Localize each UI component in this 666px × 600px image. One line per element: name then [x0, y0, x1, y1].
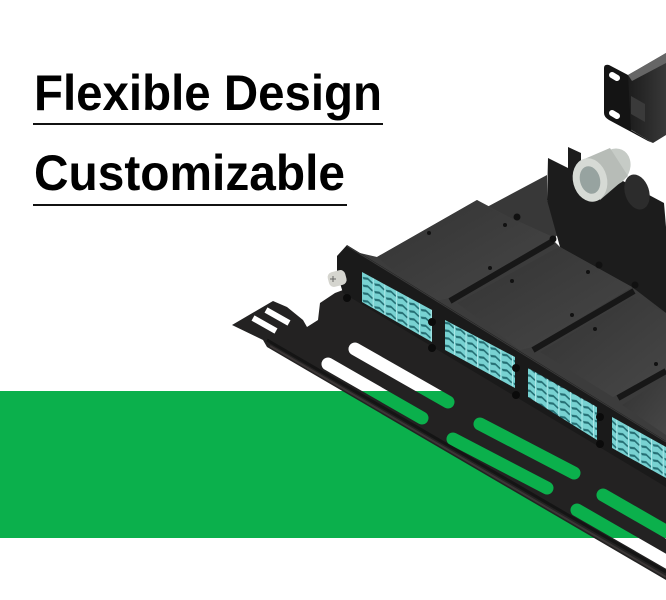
module cover 4: [622, 377, 666, 435]
module cover gaps: [450, 241, 666, 398]
tray floor: [487, 175, 560, 240]
module cover 2: [457, 247, 632, 350]
cover screws: [427, 214, 658, 366]
flange holes: [612, 75, 617, 116]
rear wall: [547, 147, 666, 320]
thumb screw: [326, 269, 348, 288]
box flange: [604, 65, 653, 143]
box switch: [631, 96, 645, 122]
cable gland: [568, 143, 637, 206]
blanking grommet: [620, 171, 654, 213]
module cover 1: [377, 200, 553, 302]
module latches: [343, 294, 604, 448]
port block 3: [528, 368, 597, 440]
module backing: [347, 200, 666, 445]
module cover 3: [540, 297, 666, 397]
port block 1: [362, 272, 432, 342]
front panel: [337, 245, 666, 487]
panel top edge highlight: [347, 246, 666, 442]
tray base plate with slots: [232, 290, 666, 580]
port block 2: [445, 320, 515, 388]
box body: [628, 53, 666, 143]
heading rule: Flexible Design: [33, 123, 383, 125]
product: upper cover box: [604, 53, 666, 143]
port block 4: [612, 417, 666, 478]
tray front lip: [267, 340, 666, 577]
product: fiber enclosure tray: [232, 143, 666, 580]
box top face: [628, 53, 666, 81]
heading: Customizable: Customizable: [34, 145, 345, 201]
heading rule: Customizable: [33, 204, 347, 206]
green band: [0, 391, 666, 538]
heading: Flexible Design: Flexible Design: [34, 65, 382, 121]
